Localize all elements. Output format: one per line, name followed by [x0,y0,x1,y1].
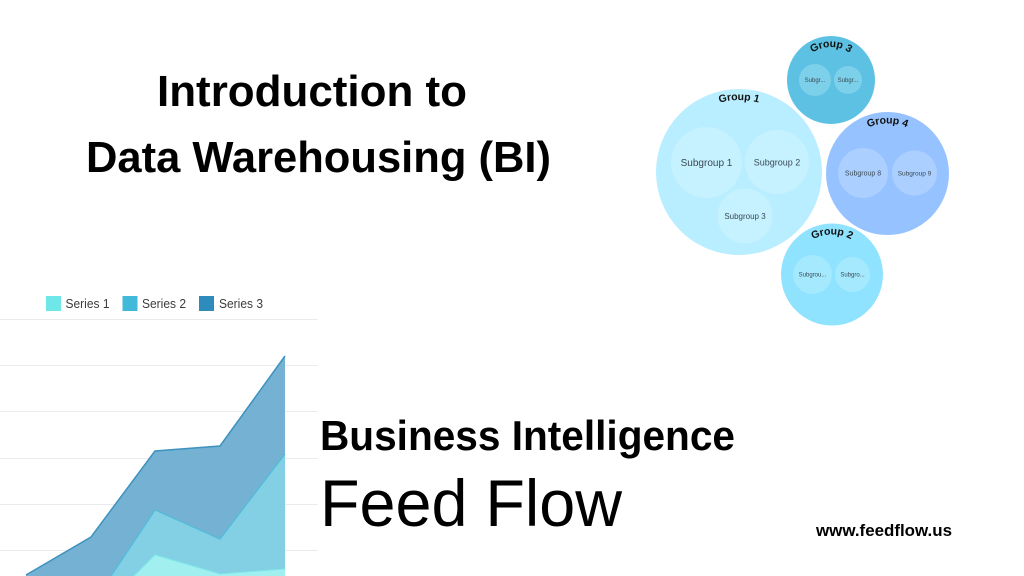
group 4 bubble: Subgroup 8 [845,170,881,178]
group 1 bubble [656,89,822,255]
group 2 bubble: Group 2 [812,228,854,240]
group 1 bubble: Group 1 [718,94,759,102]
group 3 bubble: Group 3 [810,41,852,52]
series 3 area [26,356,285,576]
group 2 bubble: Subgro... [840,272,865,278]
group 2 bubble: Subgrou... [799,272,827,278]
title [86,67,551,182]
group 1 bubble: Subgroup 2 [754,158,800,168]
group 4 bubble [826,112,949,235]
bubble chart [656,36,949,326]
legend: Series 1 [66,296,110,311]
title: Data Warehousing (BI) [86,133,551,182]
subtitle: Feed Flow [320,466,622,540]
legend: Series 3 [219,296,263,311]
subtitle: Business Intelligence [320,412,735,459]
series 1 area [134,555,285,576]
group 2 bubble [781,224,883,326]
title: Introduction to [157,67,467,116]
group 1 bubble: Subgroup 3 [724,212,766,221]
area chart [0,296,318,576]
legend: Series 2 [142,296,186,311]
group 4 bubble: Subgroup 9 [898,170,932,178]
group 3 bubble: Subgr... [838,78,859,84]
legend [46,296,263,311]
group 4 bubble: Group 4 [867,118,908,127]
subtitle [320,412,735,540]
series 2 area [111,454,285,576]
website url: www.feedflow.us [815,521,952,540]
group 3 bubble: Subgr... [805,78,826,84]
group 3 bubble [787,36,875,124]
group 1 bubble: Subgroup 1 [681,158,733,169]
